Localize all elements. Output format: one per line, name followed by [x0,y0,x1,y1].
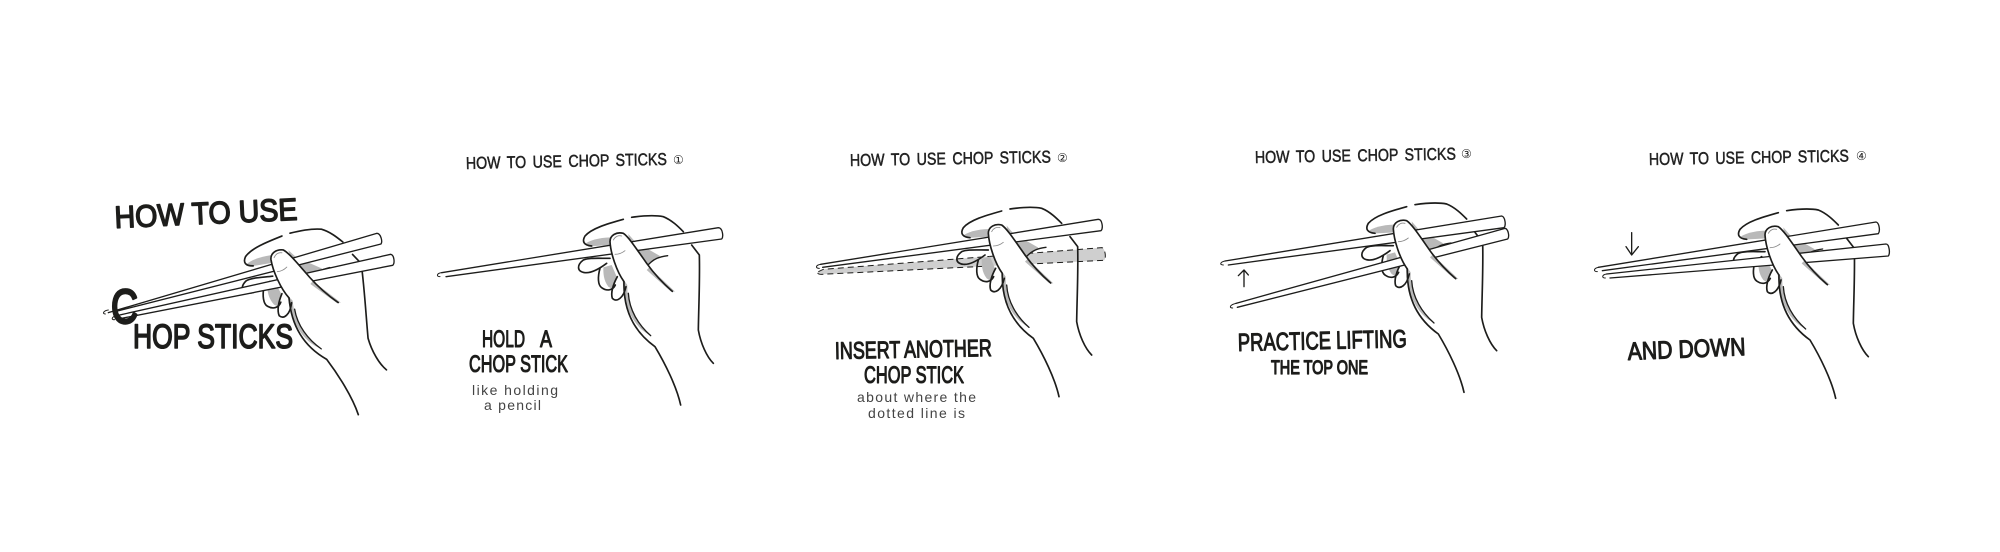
step 1 instruction: CHOP STICK [469,351,568,378]
illustration: hand with dotted second chopstick [816,207,1105,397]
step 2 number: ② [1057,151,1068,165]
step 1 heading: HOW TO USE CHOP STICKS [466,150,667,173]
step 2 instruction: dotted line is [868,405,965,421]
step 4 heading: HOW TO USE CHOP STICKS [1649,147,1849,169]
panel: step 4 [1594,147,1889,398]
heading: chop sticks [111,281,293,356]
step 3 instruction [1238,325,1407,379]
step 3 instruction: PRACTICE LIFTING [1238,325,1407,357]
step 2 instruction: INSERT ANOTHER [835,335,992,365]
arrow: down [1626,233,1638,255]
step 2 instruction [835,335,992,421]
illustration: hand lifting top chopstick [1221,203,1509,392]
step 1 instruction: HOLD [482,326,525,353]
illustration: hand lowering top chopstick [1594,209,1889,398]
heading: chop sticks: C [111,281,138,334]
step 3 heading: HOW TO USE CHOP STICKS [1255,144,1456,167]
step 1 instruction: A [540,326,552,353]
step 4 number: ④ [1856,149,1867,163]
heading: chop sticks: HOP STICKS [133,318,293,356]
panel: title with hand holding two chopsticks [103,192,394,425]
panel: step 2 [816,147,1105,421]
step 3 number: ③ [1461,147,1472,161]
step 3 instruction: THE TOP ONE [1271,358,1368,379]
step 1 instruction: a pencil [484,397,541,413]
step 2 heading: HOW TO USE CHOP STICKS [850,147,1051,170]
heading: how to use: HOW TO USE [114,192,298,235]
arrow: up [1238,270,1248,287]
step 2 instruction: CHOP STICK [864,362,964,389]
step 4 instruction: AND DOWN [1627,333,1746,366]
panel: step 1 [437,150,723,413]
step 1 instruction: like holding [472,382,558,398]
illustration: hand holding one chopstick [437,216,723,405]
step 2 instruction: about where the [857,389,976,405]
panel: step 3 [1221,144,1509,392]
step 1 instruction [469,326,568,413]
illustration: hand and chopsticks, title [103,223,394,425]
step 1 number: ① [673,153,684,167]
